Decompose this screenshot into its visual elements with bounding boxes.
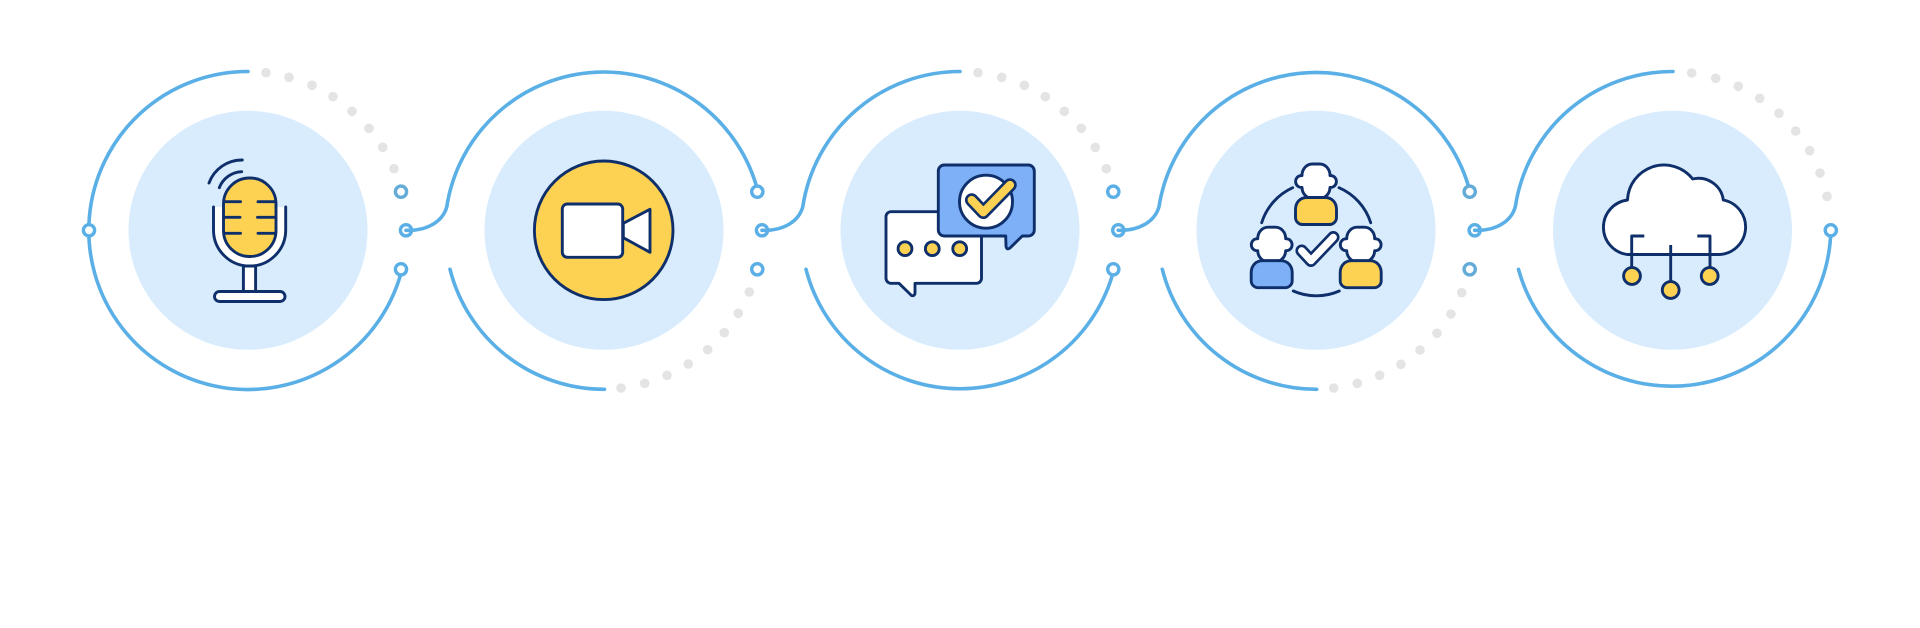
- upper ring arc with connector: [762, 72, 960, 230]
- icon: microphone: [209, 160, 286, 302]
- lower ring arc: [1518, 230, 1831, 386]
- dotted ring remainder: [973, 68, 1111, 174]
- lower ring arc: [806, 269, 1114, 389]
- dotted ring remainder: [616, 287, 754, 393]
- background disc: [484, 111, 724, 350]
- ring nodes: [1464, 186, 1480, 275]
- icon: video camera: [534, 161, 673, 300]
- lower ring arc: [450, 269, 604, 389]
- dotted ring remainder: [1687, 68, 1832, 201]
- ring nodes: [1108, 186, 1124, 275]
- icon: chat bubbles with check: [886, 165, 1034, 296]
- lower ring arc: [1162, 269, 1317, 389]
- step 1: microphone: [83, 68, 412, 389]
- upper ring arc with connector: [406, 72, 758, 230]
- upper ring arc with connector: [1118, 72, 1470, 230]
- background disc: [128, 111, 368, 350]
- background disc: [840, 111, 1080, 350]
- icon: three people and check: [1251, 164, 1381, 296]
- step 5: cloud network: [1475, 68, 1836, 386]
- step 2: video camera: [406, 72, 768, 393]
- background disc: [1553, 111, 1792, 350]
- dotted ring remainder: [261, 68, 399, 174]
- outer ring arc: [89, 71, 402, 389]
- icon: cloud with network nodes: [1603, 165, 1746, 298]
- background disc: [1196, 111, 1436, 350]
- step 4: team consensus: [1118, 72, 1480, 393]
- step 3: chat approval: [762, 68, 1124, 389]
- ring nodes: [752, 186, 768, 275]
- ring nodes: [83, 186, 412, 275]
- dotted ring remainder: [1329, 288, 1466, 393]
- upper ring arc with connector: [1475, 71, 1673, 230]
- end node: [1825, 225, 1836, 236]
